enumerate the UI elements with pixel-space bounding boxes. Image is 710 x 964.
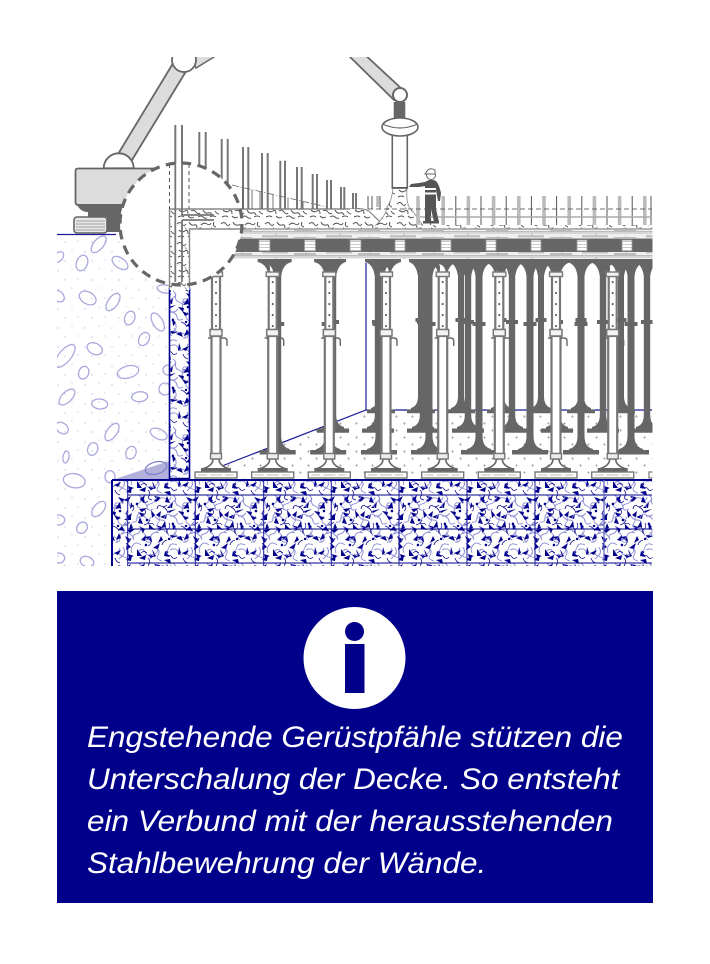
front row of props: [195, 258, 653, 478]
worker: [409, 169, 441, 224]
wedge under wall: [115, 459, 169, 479]
basement wall: [170, 288, 190, 478]
near row of dark props: [260, 259, 649, 454]
caption text: Stahlbewehrung der Wände.: [87, 847, 486, 880]
ground with pebbles: [57, 235, 169, 566]
illustration: construction cross-section: [57, 57, 652, 566]
ceiling formwork: [233, 230, 652, 259]
back row of props: [367, 259, 635, 413]
wall rebar in perspective: [175, 125, 356, 209]
caption text: Unterschalung der Decke. So entsteht: [87, 763, 619, 796]
caption text: ein Verbund mit der herausstehenden: [87, 805, 613, 838]
foundation slab: [112, 480, 654, 570]
info panel: [57, 591, 653, 903]
slab rebar row: [368, 196, 652, 225]
caption text: [87, 721, 623, 880]
detail magnifier circle: [120, 163, 242, 290]
floor with back wall line: [190, 263, 652, 479]
icon: information: [304, 607, 406, 709]
detail: wall-slab junction: [170, 163, 242, 290]
middle row of props: [317, 259, 663, 433]
fresh concrete slab and heaps: [240, 188, 652, 230]
left crane: [57, 48, 214, 234]
concrete pump boom: [345, 52, 418, 188]
caption text: Engstehende Gerüstpfähle stützen die: [87, 721, 623, 754]
